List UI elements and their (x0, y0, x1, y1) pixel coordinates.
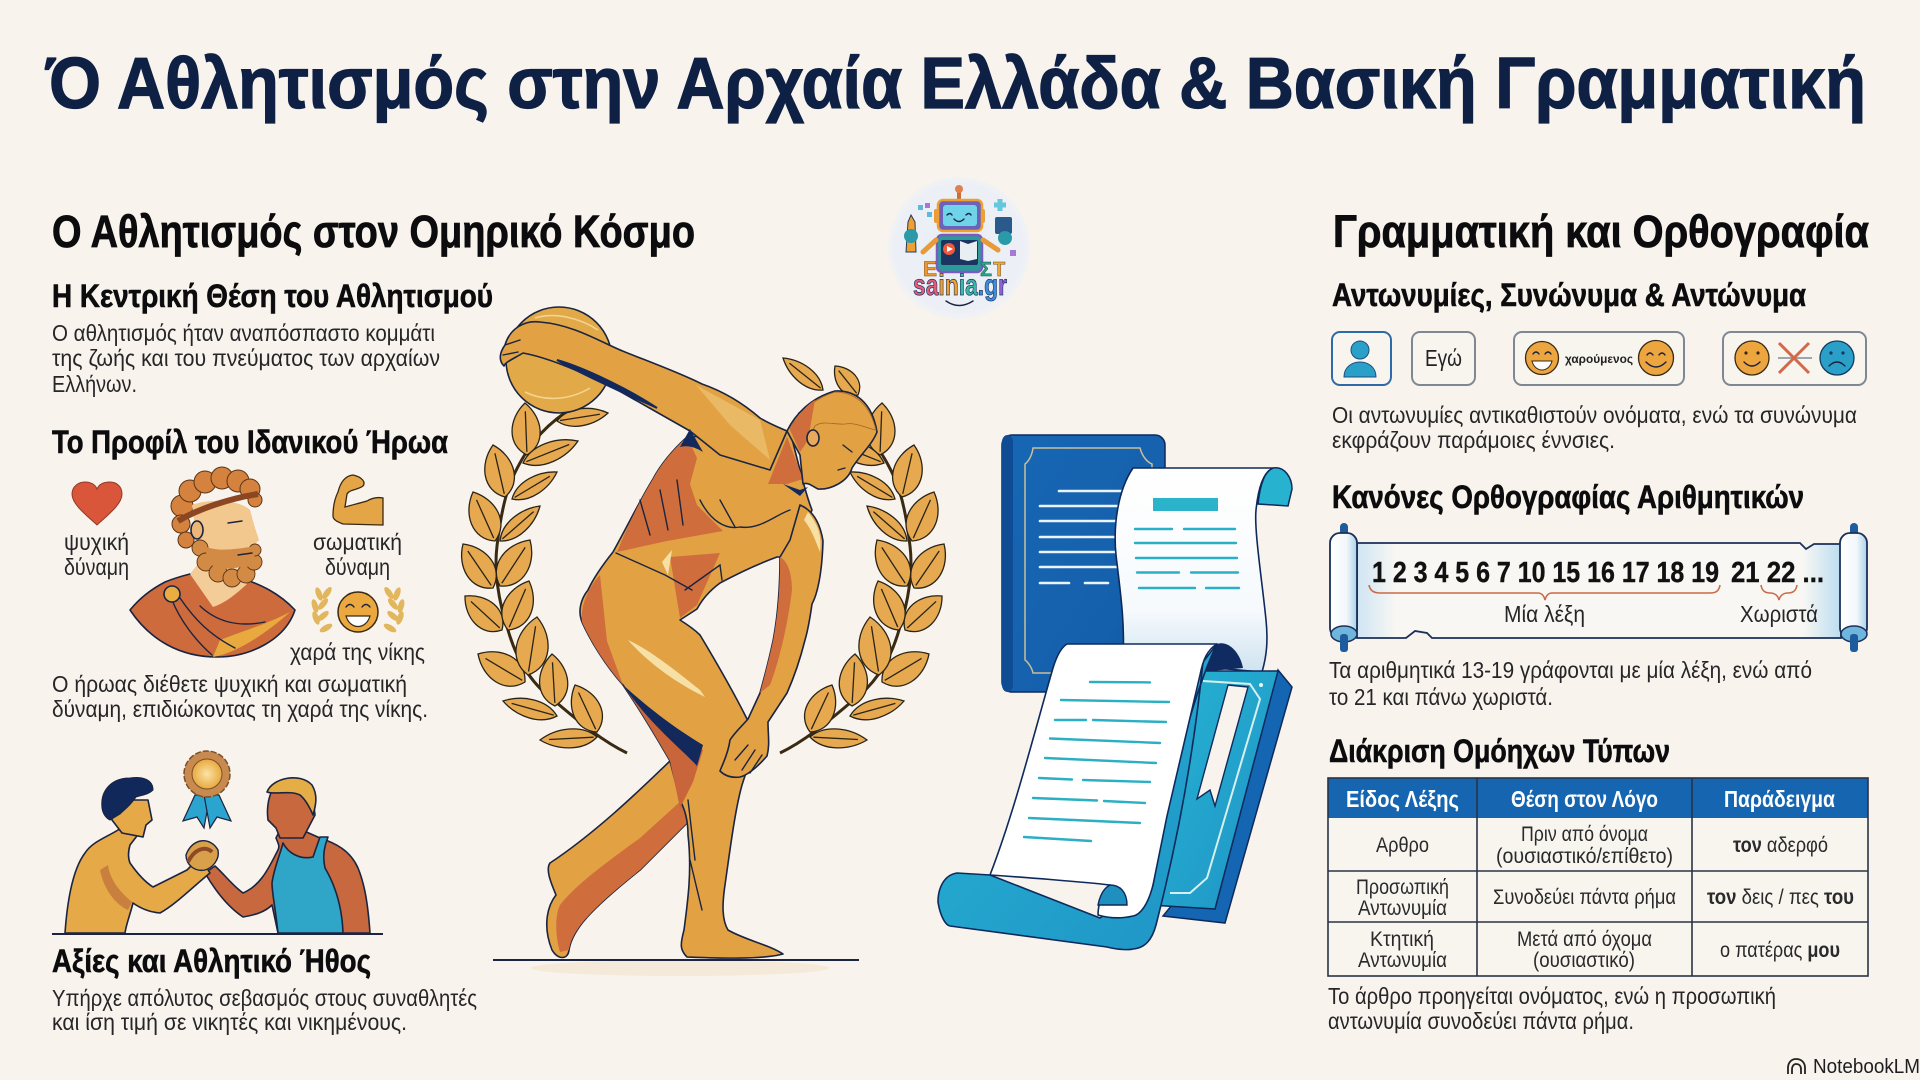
text block: hero description (52, 671, 428, 722)
logo: sainia.gr robot badge: Τ (993, 259, 1005, 281)
card: synonyms: χαρούμενος (1565, 352, 1633, 366)
text block: table note: Το άρθρο προηγείται ονόματος, ενώ η προσωπική (1328, 983, 1776, 1009)
text block: hero description: Ο ήρωας διέθετε ψυχική και σωματική (52, 671, 407, 697)
text block: central place of sport: Ο αθλητισμός ήταν αναπόσπαστο κομμάτι (52, 320, 435, 346)
upper scroll (1115, 468, 1292, 672)
icon card: person (1332, 332, 1391, 385)
text block: pronouns: Οι αντωνυμίες αντικαθιστούν ονόματα, ενώ τα συνώνυμα (1332, 402, 1857, 428)
text block: pronouns (1332, 402, 1857, 453)
logo: sainia.gr robot badge: sainia.gr (913, 269, 1007, 302)
label: soul strength (64, 529, 129, 580)
text block: central place of sport: της ζωής και του πνεύματος των αρχαίων (52, 345, 440, 371)
subheading: central place of sport: Η Κεντρική Θέση του Αθλητισμού (52, 278, 493, 314)
label: joy of victory: χαρά της νίκης (290, 639, 425, 665)
illustration: books and scrolls (938, 435, 1292, 950)
logo: sainia.gr robot badge: Ε (923, 258, 937, 281)
lower scroll (938, 643, 1243, 950)
illustration: two athletes shaking hands with medal (52, 751, 383, 934)
text block: values and athletic ethos (52, 985, 477, 1035)
text block: pronouns: εκφράζουν παράμοιες έννσιες. (1332, 427, 1615, 453)
table row: personal pronoun: Προσωπική (1356, 876, 1449, 899)
panel: sport in the Homeric world (52, 206, 695, 1035)
table row: personal pronoun: Συνοδεύει πάντα ρήμα (1493, 886, 1676, 909)
text block: table note (1328, 983, 1776, 1034)
icon: heart, soul strength (72, 482, 122, 525)
table row: personal pronoun (1356, 876, 1854, 920)
table row: possessive pronoun: Μετά από όχομα (1517, 928, 1652, 951)
subheading: numeral spelling rules: Κανόνες Ορθογραφίας Αριθμητικών (1332, 479, 1804, 515)
scroll: numerals (1330, 523, 1867, 652)
illustration: hero bust (130, 467, 295, 657)
table header (1346, 786, 1835, 812)
heading: sport in the Homeric world: Ο Αθλητισμός στον Ομηρικό Κόσμο (52, 206, 695, 257)
text block: hero description: δύναμη, επιδιώκοντας τη χαρά της νίκης. (52, 696, 428, 722)
label: soul strength: δύναμη (64, 554, 129, 580)
card: pronoun I: Εγώ (1425, 345, 1462, 371)
text block: central place of sport (52, 320, 440, 397)
table row: article: Αρθρο (1376, 834, 1429, 857)
card: synonyms (1514, 332, 1684, 385)
panel: grammar and spelling (1328, 206, 1869, 1034)
table header: Θέση στον Λόγο (1511, 786, 1658, 812)
text block: values and athletic ethos: και ίση τιμή σε νικητές και νικημένους. (52, 1009, 407, 1035)
ground shadow (530, 960, 830, 976)
wreath: top right leaves (778, 351, 866, 401)
text block: table note: αντωνυμία συνοδεύει πάντα ρήμα. (1328, 1008, 1634, 1034)
text block: numerals: το 21 και πάνω χωριστά. (1329, 684, 1553, 710)
ground line (493, 959, 859, 961)
label: separately: Χωριστά (1740, 601, 1818, 627)
text block: central place of sport: Ελλήνων. (52, 371, 137, 397)
discus thrower figure (500, 322, 877, 958)
card: pronoun I (1412, 332, 1475, 385)
label: bodily strength: δύναμη (325, 554, 390, 580)
logo: sainia.gr robot badge: Σ (980, 259, 992, 281)
table header: Παράδειγμα (1724, 786, 1835, 812)
text block: numerals (1329, 657, 1812, 710)
table row: possessive pronoun (1358, 928, 1840, 972)
numbers written as one word: 1 2 3 4 5 6 7 10 15 16 17 18 19 (1372, 557, 1719, 589)
brace: one word (1369, 585, 1720, 600)
table header: Είδος Λέξης (1346, 786, 1459, 812)
subheading: pronouns, synonyms, antonyms: Αντωνυμίες, Συνώνυμα & Αντώνυμα (1332, 277, 1806, 313)
wreath: right branch (780, 402, 956, 753)
table row: article: (ουσιαστικό/επίθετο) (1496, 845, 1673, 868)
text block: values and athletic ethos: Υπήρχε απόλυτος σεβασμός στους συναθλητές (52, 985, 477, 1011)
table row: article: Πριν από όνομα (1521, 823, 1648, 846)
table row: personal pronoun: Αντωνυμία (1358, 897, 1447, 920)
numbers written separately: 21 22 ... (1731, 557, 1824, 589)
logo: sainia.gr robot badge (888, 177, 1030, 319)
table row: article (1376, 823, 1828, 868)
label: soul strength: ψυχική (64, 529, 129, 555)
discus (506, 307, 612, 413)
subheading: ideal hero profile: Το Προφίλ του Ιδανικού Ήρωα (52, 424, 448, 460)
wreath: left branch (451, 402, 627, 753)
card: antonyms (1723, 332, 1866, 385)
table row: possessive pronoun: (ουσιαστικό) (1533, 949, 1635, 972)
text block: numerals: Τα αριθμητικά 13-19 γράφονται με μία λέξη, ενώ από (1329, 657, 1812, 683)
illustration: discus thrower in laurel wreath (451, 307, 956, 976)
icon: flexed arm, bodily strength (333, 475, 383, 525)
teal book (1150, 670, 1292, 923)
table row: possessive pronoun: Αντωνυμία (1358, 949, 1447, 972)
brace: separately (1761, 585, 1797, 600)
blue book (1002, 435, 1165, 692)
table row: possessive pronoun: ο πατέρας μου (1720, 939, 1840, 962)
table row: personal pronoun: τον δεις / πες του (1707, 886, 1854, 909)
subheading: values and athletic ethos: Αξίες και Αθλητικό Ήθος (52, 943, 371, 979)
label: one word: Μία λέξη (1504, 601, 1585, 627)
table row: possessive pronoun: Κτητική (1370, 928, 1434, 951)
icon: laurel smiley, joy of victory (310, 586, 406, 634)
table row: article: τον αδερφό (1733, 834, 1828, 857)
table: homophone forms (1328, 778, 1868, 976)
label: bodily strength (313, 529, 402, 580)
subheading: homophone forms: Διάκριση Ομόηχων Τύπων (1329, 733, 1670, 769)
label: bodily strength: σωματική (313, 529, 402, 555)
